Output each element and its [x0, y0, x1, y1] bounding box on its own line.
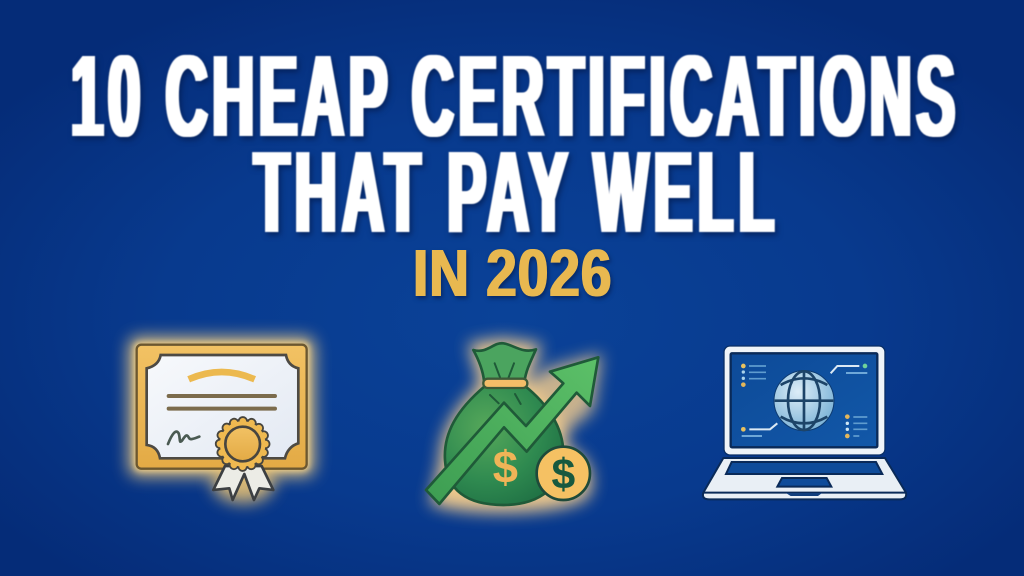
icon: laptop with globe	[703, 346, 906, 499]
dollar sign on bag: $	[493, 442, 518, 493]
coin	[537, 447, 590, 500]
subtitle: in 2026: IN 2026	[413, 236, 611, 310]
coin: $	[551, 451, 575, 499]
icon: money bag with rising arrow	[426, 338, 602, 513]
icon: certificate	[128, 337, 315, 503]
title line 1: 10 CHEAP CERTIFICATIONS	[71, 32, 955, 161]
screen details	[741, 364, 867, 438]
title	[71, 32, 955, 257]
title line 2: THAT PAY WELL	[254, 128, 774, 257]
globe	[774, 371, 834, 431]
